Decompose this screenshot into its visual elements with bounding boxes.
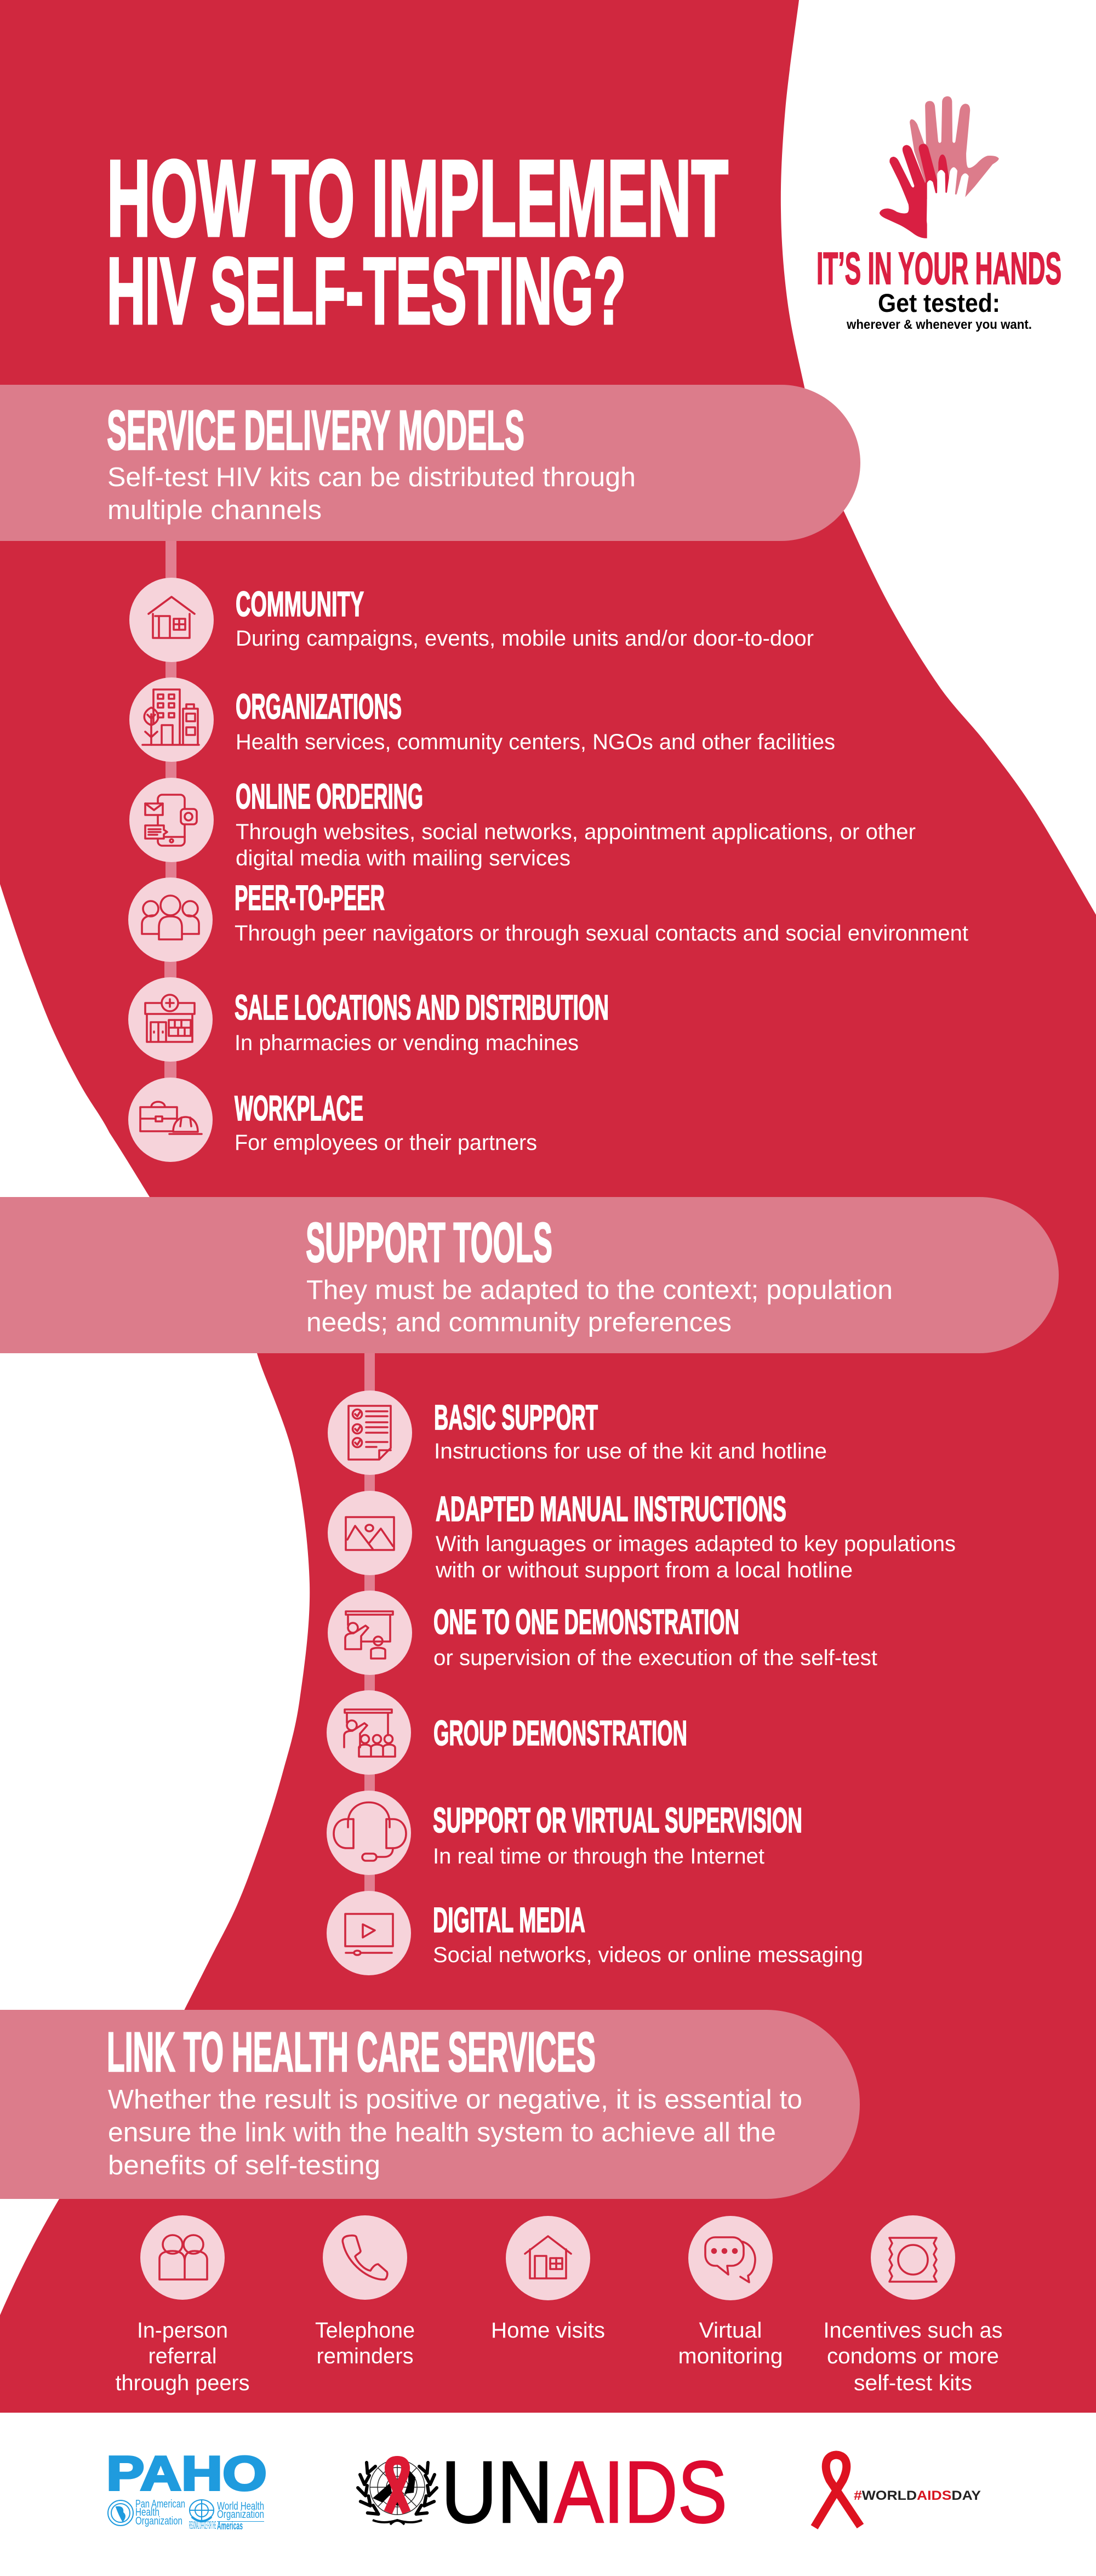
item: workplace: [128, 1078, 537, 1162]
wordmark UN: UN: [441, 2443, 553, 2541]
item: telephone reminders: [315, 2215, 415, 2368]
heading: SUPPORT TOOLS: [306, 1211, 552, 1274]
icon: briefcase and helmet: [140, 1102, 202, 1134]
item: adapted manual instructions: [328, 1489, 956, 1582]
item: virtual monitoring: [678, 2216, 783, 2368]
text: ORGANIZATIONS: [236, 687, 402, 726]
label: [115, 2318, 250, 2395]
text: DIGITAL MEDIA: [433, 1900, 585, 1940]
icon: buildings and tree: [142, 689, 199, 745]
icon: red ribbon: [814, 2455, 860, 2527]
text: or supervision of the execution of the self-test: [433, 1646, 877, 1670]
text: Through peer navigators or through sexual contacts and social environment: [235, 921, 968, 945]
description: ensure the link with the health system to achieve all the: [108, 2118, 776, 2147]
PAHO name: Organization: [135, 2515, 182, 2527]
description: benefits of self-testing: [108, 2151, 380, 2180]
label: condoms or more: [827, 2344, 999, 2368]
text: digital media with mailing services: [236, 846, 570, 870]
label: reminders: [317, 2344, 413, 2368]
icon: image: [346, 1517, 394, 1550]
text: [236, 777, 916, 870]
connector: service delivery timeline: [165, 537, 176, 1085]
text: COMMUNITY: [236, 584, 364, 624]
item: home visits: [491, 2216, 605, 2343]
label: [315, 2318, 415, 2368]
PAHO name: Pan American: [135, 2498, 185, 2510]
label: referral: [148, 2344, 217, 2368]
text: ONLINE ORDERING: [236, 777, 423, 816]
text: [433, 1602, 877, 1670]
description: multiple channels: [107, 495, 322, 525]
heading: SERVICE DELIVERY MODELS: [107, 399, 524, 461]
logo: world AIDS day: [814, 2455, 981, 2527]
WHO name: [189, 2500, 264, 2532]
text: Health services, community centers, NGOs and other facilities: [236, 730, 835, 754]
panel: service delivery models banner: [0, 385, 860, 541]
text: with or without support from a local hotline: [435, 1558, 853, 1582]
icon: UN emblem with red ribbon: [358, 2460, 437, 2524]
wordmark AIDS: AIDS: [554, 2443, 727, 2541]
item: organizations: [129, 677, 835, 762]
icon: two people: [159, 2235, 207, 2279]
icon: smartphone with messages: [145, 795, 197, 846]
logo: PAHO: REGIONAL OFFICE FOR THE: [189, 2520, 216, 2532]
item: basic support: [328, 1390, 827, 1475]
text: Through websites, social networks, appointment applications, or other: [236, 820, 916, 844]
text: SALE LOCATIONS AND DISTRIBUTION: [235, 988, 609, 1027]
connector: support tools timeline: [364, 1348, 375, 1935]
description: Whether the result is positive or negative, it is essential to: [108, 2085, 802, 2115]
icon: pharmacy: [145, 995, 195, 1042]
text: [236, 687, 835, 754]
item: incentives: [823, 2215, 1003, 2395]
item: peer-to-peer: [128, 877, 968, 962]
text: [433, 1900, 863, 1967]
description: [306, 1275, 893, 1337]
label: [678, 2318, 783, 2368]
icon: telephone handset: [342, 2236, 387, 2279]
text: [434, 1398, 827, 1463]
text: [235, 1088, 537, 1155]
item: in-person referral: [115, 2215, 250, 2395]
icon: overlapping hands: [880, 96, 999, 239]
text: Social networks, videos or online messaging: [433, 1943, 863, 1967]
text: ONE TO ONE DEMONSTRATION: [433, 1602, 739, 1642]
item: community: [129, 578, 814, 662]
WHO name: Americas: [217, 2520, 243, 2532]
text: For employees or their partners: [235, 1131, 537, 1155]
PAHO name: [135, 2498, 185, 2527]
icon: PAHO emblem: [108, 2500, 133, 2526]
label: self-test kits: [854, 2371, 972, 2395]
text: [236, 584, 814, 651]
title: [107, 138, 728, 344]
description: Self-test HIV kits can be distributed through: [107, 463, 636, 492]
label: through peers: [115, 2371, 250, 2395]
label: [823, 2318, 1003, 2395]
logo: it's in your hands campaign: [817, 96, 1061, 332]
logo: PAHO: [106, 2446, 267, 2532]
sub slogan: Get tested:: [878, 288, 1000, 317]
icon: checklist document: [349, 1406, 391, 1460]
text: During campaigns, events, mobile units and/or door-to-door: [236, 626, 814, 651]
icon: presenter and group: [344, 1709, 395, 1757]
text: [235, 988, 609, 1055]
item: online ordering: [129, 777, 916, 870]
WHO name: Organization: [217, 2509, 264, 2521]
item: group demonstration: [327, 1690, 687, 1775]
label: In-person: [137, 2318, 228, 2343]
description: They must be adapted to the context; population: [306, 1275, 893, 1305]
description: [108, 2085, 802, 2180]
text: GROUP DEMONSTRATION: [433, 1713, 687, 1753]
item: support or virtual supervision: [327, 1791, 802, 1875]
icon: presenter and learner: [345, 1611, 393, 1659]
logo: PAHO: PAHO: [106, 2446, 267, 2500]
icon: condom package: [889, 2238, 937, 2282]
text: With languages or images adapted to key populations: [436, 1532, 956, 1556]
icon: video player: [345, 1914, 393, 1955]
label: Home visits: [491, 2318, 605, 2343]
label: Telephone: [315, 2318, 415, 2343]
description: needs; and community preferences: [306, 1308, 732, 1337]
text: PEER-TO-PEER: [235, 878, 385, 917]
connector: service delivery timeline lower: [164, 910, 175, 1124]
panel: link to health care services banner: [0, 2010, 860, 2199]
icon: chat bubbles: [705, 2237, 755, 2282]
text: [433, 1800, 802, 1868]
description: [107, 463, 636, 525]
icon: house: [525, 2236, 571, 2278]
text: In real time or through the Internet: [433, 1844, 764, 1868]
icon: house: [149, 597, 195, 638]
item: one to one demonstration: [328, 1591, 877, 1675]
logo: UNAIDS: [358, 2443, 727, 2541]
label: monitoring: [678, 2344, 783, 2368]
text: In pharmacies or vending machines: [235, 1031, 579, 1055]
text: ADAPTED MANUAL INSTRUCTIONS: [436, 1489, 786, 1529]
item: sale locations and distribution: [128, 977, 609, 1062]
heading: LINK TO HEALTH CARE SERVICES: [107, 2021, 596, 2083]
tagline: wherever & whenever you want.: [846, 317, 1032, 332]
icon: headset: [334, 1802, 406, 1861]
PAHO name: Health: [135, 2506, 159, 2518]
panel: support tools banner: [0, 1197, 1059, 1353]
icon: group of three people: [142, 896, 199, 939]
text: BASIC SUPPORT: [434, 1398, 598, 1437]
text: SUPPORT OR VIRTUAL SUPERVISION: [433, 1800, 802, 1840]
label: Incentives such as: [823, 2318, 1003, 2343]
WHO name: World Health: [217, 2500, 264, 2512]
text: [235, 878, 968, 945]
text: [435, 1489, 956, 1582]
icon: WHO emblem: [190, 2499, 214, 2522]
title: HIV SELF-TESTING?: [107, 238, 626, 344]
text: Instructions for use of the kit and hotline: [434, 1439, 827, 1463]
item: digital media: [327, 1891, 863, 1975]
hashtag: #WORLD AIDS DAY: [854, 2488, 981, 2503]
text: WORKPLACE: [235, 1088, 363, 1128]
label: Virtual: [699, 2318, 762, 2343]
